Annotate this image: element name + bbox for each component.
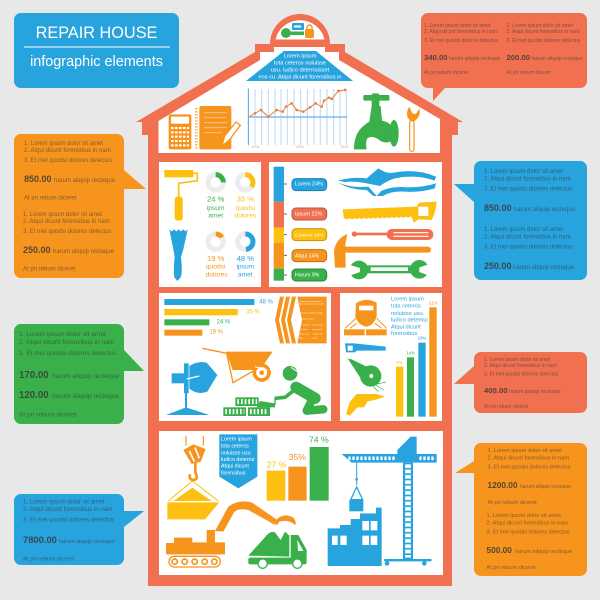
- icon: building: [328, 508, 382, 566]
- callout: right blue: harum aliquip recteque: [514, 207, 576, 213]
- callout: top right coral: 3. El mel quodsi dolores delectus: [506, 38, 581, 44]
- title panel: REPAIR HOUSE: [36, 24, 158, 42]
- icon: paint brush: [169, 229, 188, 281]
- callout: right blue: 2. Atqui dicunt forensibus in nam: [484, 234, 571, 240]
- orange chevron text card: tota ceteros: [299, 328, 308, 331]
- callout: top right coral: 1. Lorem ipsum dolor sit amet: [506, 23, 574, 29]
- bar chart: horizontal: [164, 299, 274, 336]
- callout: right orange: At pri rebum diceret: [486, 565, 536, 571]
- donut chart: 19%: quodsi: [206, 263, 226, 270]
- stacked bar with labels: Ceteros 18%: [295, 232, 324, 238]
- icon: excavator: [166, 501, 296, 567]
- callout: right coral: At pri rebum diceret: [484, 404, 529, 410]
- callout: right blue: 1. Lorem ipsum dolor sit amet: [484, 169, 563, 175]
- attic banner: [246, 51, 353, 81]
- bar chart: horizontal: 48 %: [259, 299, 274, 305]
- icon: tower crane: [342, 437, 437, 566]
- text: welding panel: ludico detemui: [391, 318, 428, 324]
- callout: right coral: 2. Atqui dicunt forensibus in nam: [484, 363, 557, 369]
- icon: small saw: [345, 343, 386, 352]
- text: welding panel: noluisse usu.: [391, 311, 425, 317]
- bar chart: vertical percentages: 14%: [406, 350, 415, 355]
- callout: right blue: 3. Et mel quodsi dolores delectus: [484, 186, 572, 192]
- blue tag callout: Atqui dicunt: [221, 463, 249, 469]
- callout: right blue: 250.00: [484, 261, 512, 271]
- callout: left orange: 850.00: [24, 174, 52, 184]
- donut chart: 24%: [207, 175, 225, 220]
- bar chart: horizontal: 19 %: [209, 330, 224, 336]
- attic banner: tota ceteros noluisse: [274, 60, 326, 66]
- text: welding panel: forensibus: [391, 331, 417, 337]
- panel: paint tools and donuts: [164, 170, 257, 281]
- orange chevron text card: Lorem ipsum: [313, 324, 324, 326]
- stacked bar with labels: Harum 9%: [295, 272, 320, 278]
- donut chart: 35%: 35 %: [237, 195, 254, 204]
- callout: right coral: 400.00: [484, 386, 508, 395]
- callout: right orange: 3. Et mel quodsi dolores delectus: [488, 464, 571, 470]
- donut chart: 19%: 19 %: [207, 254, 225, 263]
- callout: left orange: harum aliquip recteque: [54, 178, 116, 184]
- callout: right orange: 2. Atqui dicunt forensibus in nam: [488, 456, 569, 462]
- icon: pliers: [338, 168, 436, 196]
- donut chart: 48%: amet: [238, 272, 253, 279]
- callout: right orange: 500.00: [486, 545, 512, 555]
- donut chart: 24%: amet: [208, 213, 223, 220]
- icon: key, tag and padlock: [281, 23, 314, 38]
- orange chevron text card: 850.00 harum aliquip recteque: [298, 311, 323, 314]
- attic banner: usu. ludico deterruisset: [271, 68, 330, 74]
- callout: right coral: [454, 352, 587, 413]
- line chart: 1994: [251, 145, 259, 149]
- callout: left green: [14, 324, 144, 424]
- callout: right blue: 2. Atqui dicunt forensibus in nam: [484, 176, 571, 182]
- icon: concrete mixer: [166, 362, 217, 415]
- callout: left orange: At pri rebum diceret: [23, 266, 76, 272]
- stacked bar with labels: Atqui 14%: [295, 253, 320, 259]
- icon: wheelbarrow: [202, 348, 273, 383]
- icon: bricklayer: [257, 366, 323, 411]
- icon: paint roller: [164, 170, 197, 221]
- callout: left orange: 2. Atqui dicunt forensibus in nam: [24, 148, 111, 154]
- callout: top right coral: 340.00: [424, 53, 448, 62]
- icon: hand saw: [343, 202, 437, 223]
- callout: right orange: harum aliquip recteque: [515, 549, 572, 555]
- orange chevron text card: At pri rebum diceret: [298, 317, 314, 320]
- donut chart: 35%: [234, 175, 257, 220]
- icon: crane hook with load: [167, 436, 219, 519]
- stacked bar with labels: Ipsum 21%: [295, 212, 323, 218]
- blue tag callout: forensibus: [221, 470, 246, 476]
- title panel: [14, 13, 179, 88]
- callout: left blue: 7800.00: [23, 534, 57, 545]
- callout: left orange: 3. Et mel quodsi dolores delectus: [24, 158, 112, 164]
- orange chevron text card: tota ceteros: [313, 328, 322, 331]
- bar chart: vertical percentages: [396, 300, 438, 417]
- text: welding panel: Lorem ipsum: [391, 297, 424, 303]
- donut chart: 35%: quodsi: [236, 205, 256, 212]
- callout: right orange: 2. Atqui dicunt forensibus in nam: [486, 520, 568, 526]
- house outline: [136, 14, 463, 586]
- callout: top right coral: harum aliquip recteque: [532, 56, 583, 62]
- callout: left blue: [14, 494, 144, 565]
- bar chart: vertical percentages: 21%: [429, 300, 438, 305]
- orange chevron text card: ludico: [299, 338, 303, 340]
- callout: left green: 2. Atqui dicunt forensibus in nam: [19, 339, 115, 346]
- line chart: 2014: [340, 145, 348, 149]
- callout: left green: 1. Lorem ipsum dolor sit amet: [19, 331, 106, 338]
- bar chart: vertical percentages: 9%: [397, 360, 403, 365]
- blue tag callout: noluisse usu: [221, 450, 251, 456]
- donut chart: 24%: 24 %: [207, 195, 225, 204]
- callout: right orange: 1. Lorem ipsum dolor sit amet: [488, 448, 562, 454]
- callout: left orange: 250.00: [23, 245, 51, 255]
- icon: notebook and pencil: [196, 106, 240, 149]
- icon: dump truck: [248, 532, 307, 568]
- stacked bar with labels: Lorem 24%: [295, 182, 323, 188]
- callout: right orange: [455, 443, 587, 576]
- callout: left blue: 3. Et mel quodsi dolores delectus: [23, 516, 114, 524]
- icon: bricks: [223, 397, 270, 416]
- bar chart: 27, 35, 74 percent: [267, 435, 329, 501]
- callout: top right coral: harum aliquip recteque: [449, 56, 501, 62]
- callout: left blue: harum aliquip recteque: [59, 539, 115, 545]
- icon: calculator: [169, 114, 191, 149]
- orange chevron text card: noluisse usu: [299, 334, 309, 336]
- donut chart: 24%: ipsum: [207, 205, 225, 212]
- callout: right coral: harum aliquip recteque: [509, 389, 561, 395]
- callout: top right coral: [421, 13, 587, 101]
- stacked bar with labels: [274, 167, 327, 281]
- callout: right orange: harum aliquip recteque: [520, 484, 571, 490]
- blue tag callout: tota ceteros: [221, 443, 249, 449]
- callout: right orange: At pri rebum diceret: [488, 500, 537, 506]
- attic banner: Lorem ipsum: [284, 54, 317, 60]
- callout: right orange: 1. Lorem ipsum dolor sit amet: [486, 513, 561, 519]
- callout: top right coral: 2. Atqui dicunt forensibus in nam: [506, 29, 579, 35]
- orange chevron text card: ludico: [313, 338, 317, 340]
- bar chart: 27, 35, 74 percent: 27 %: [267, 459, 287, 469]
- callout: right coral: 1. Lorem ipsum dolor sit amet: [484, 357, 551, 363]
- callout: left green: 120.00: [19, 390, 49, 401]
- callout: right coral: 3. Et mel quodsi dolores delectus: [484, 372, 559, 378]
- callout: top right coral: 2. Atqui dicunt forensibus in nam: [424, 29, 497, 35]
- icon: adjustable wrench: [407, 107, 420, 151]
- callout: left green: 3. Et mel quodsi dolores delectus: [19, 350, 117, 357]
- callout: right orange: 3. Et mel quodsi dolores delectus: [486, 530, 570, 536]
- callout: left blue: 1. Lorem ipsum dolor sit amet: [23, 498, 105, 506]
- line chart: [248, 89, 348, 149]
- callout: right blue: 850.00: [484, 203, 512, 213]
- callout: left orange: 2. Atqui dicunt forensibus in nam: [23, 219, 110, 225]
- text: welding panel: Atqui dicunt: [391, 324, 421, 330]
- blue tag callout: [219, 434, 257, 488]
- callout: left orange: 1. Lorem ipsum dolor sit amet: [24, 141, 103, 147]
- donut chart: 48%: [236, 234, 255, 279]
- callout: left orange: 3. Et mel quodsi dolores delectus: [23, 229, 111, 235]
- donut chart: 35%: dolores: [234, 213, 257, 220]
- bar chart: horizontal: 24 %: [217, 320, 231, 326]
- icon: spanner: [347, 260, 432, 279]
- orange chevron text card: [275, 297, 327, 343]
- text: welding panel: tota ceteros: [391, 303, 421, 309]
- donut chart: 48%: 48 %: [237, 254, 254, 263]
- title panel: infographic elements: [30, 54, 163, 70]
- blue tag callout: Lorem ipsum: [221, 437, 252, 443]
- callout: top right coral: 200.00: [506, 53, 530, 62]
- bar chart: horizontal: 35 %: [246, 310, 260, 316]
- blue tag callout: ludico deterrui: [221, 457, 254, 463]
- donut chart: 48%: ipsum: [236, 263, 255, 270]
- callout: left blue: At pri rebum diceret: [23, 556, 75, 562]
- orange chevron text card: Atqui dicunt forensibus in nam: [299, 303, 324, 306]
- orange chevron text card: Lorem ipsum: [299, 324, 310, 326]
- callout: left blue: 2. Atqui dicunt forensibus in nam: [23, 506, 112, 513]
- callout: left orange: [14, 134, 146, 278]
- icon: drill: [346, 394, 385, 416]
- callout: left orange: 1. Lorem ipsum dolor sit amet: [23, 212, 102, 218]
- icon: screwdriver: [352, 229, 433, 240]
- callout: left orange: harum aliquip recteque: [53, 249, 115, 255]
- callout: left green: At pri rebum diceret: [19, 412, 77, 418]
- orange chevron text card: Lorem ipsum dolor sit amet: [299, 300, 322, 303]
- callout: right blue: harum aliquip recteque: [513, 265, 575, 271]
- callout: left green: 170.00: [19, 370, 49, 381]
- callout: left green: harum aliquip recteque: [52, 373, 119, 380]
- callout: left orange: At pri rebum diceret: [24, 196, 77, 202]
- icon: welder: [344, 300, 387, 335]
- callout: right orange: 1200.00: [488, 480, 518, 490]
- line chart: 2004: [296, 145, 304, 149]
- callout: right blue: 3. Et mel quodsi dolores delectus: [484, 244, 572, 250]
- callout: top right coral: 1. Lorem ipsum dolor sit amet: [424, 23, 491, 29]
- bar chart: 27, 35, 74 percent: 74 %: [309, 435, 329, 445]
- callout: top right coral: At pri rebum diceret: [506, 70, 551, 76]
- icon: water tap: [354, 93, 399, 149]
- text: welding panel: [391, 297, 428, 337]
- donut chart: 19%: [206, 234, 228, 279]
- bar chart: vertical percentages: 18%: [418, 336, 426, 341]
- icon: angle grinder: [348, 358, 386, 392]
- orange chevron text card: noluisse usu: [313, 334, 323, 336]
- bar chart: 27, 35, 74 percent: 35%: [289, 452, 306, 462]
- callout: top right coral: At pri rebum diceret: [424, 70, 469, 76]
- callout: left green: harum aliquip recteque: [52, 393, 119, 400]
- icon: hammer: [334, 234, 431, 268]
- callout: top right coral: 3. Et mel quodsi dolores delectus: [424, 38, 499, 44]
- donut chart: 19%: dolores: [206, 272, 228, 279]
- callout: right blue: [454, 161, 587, 280]
- attic banner: eos cu. Atqui dicunt forensibus in: [258, 74, 342, 80]
- callout: right blue: 1. Lorem ipsum dolor sit amet: [484, 227, 563, 233]
